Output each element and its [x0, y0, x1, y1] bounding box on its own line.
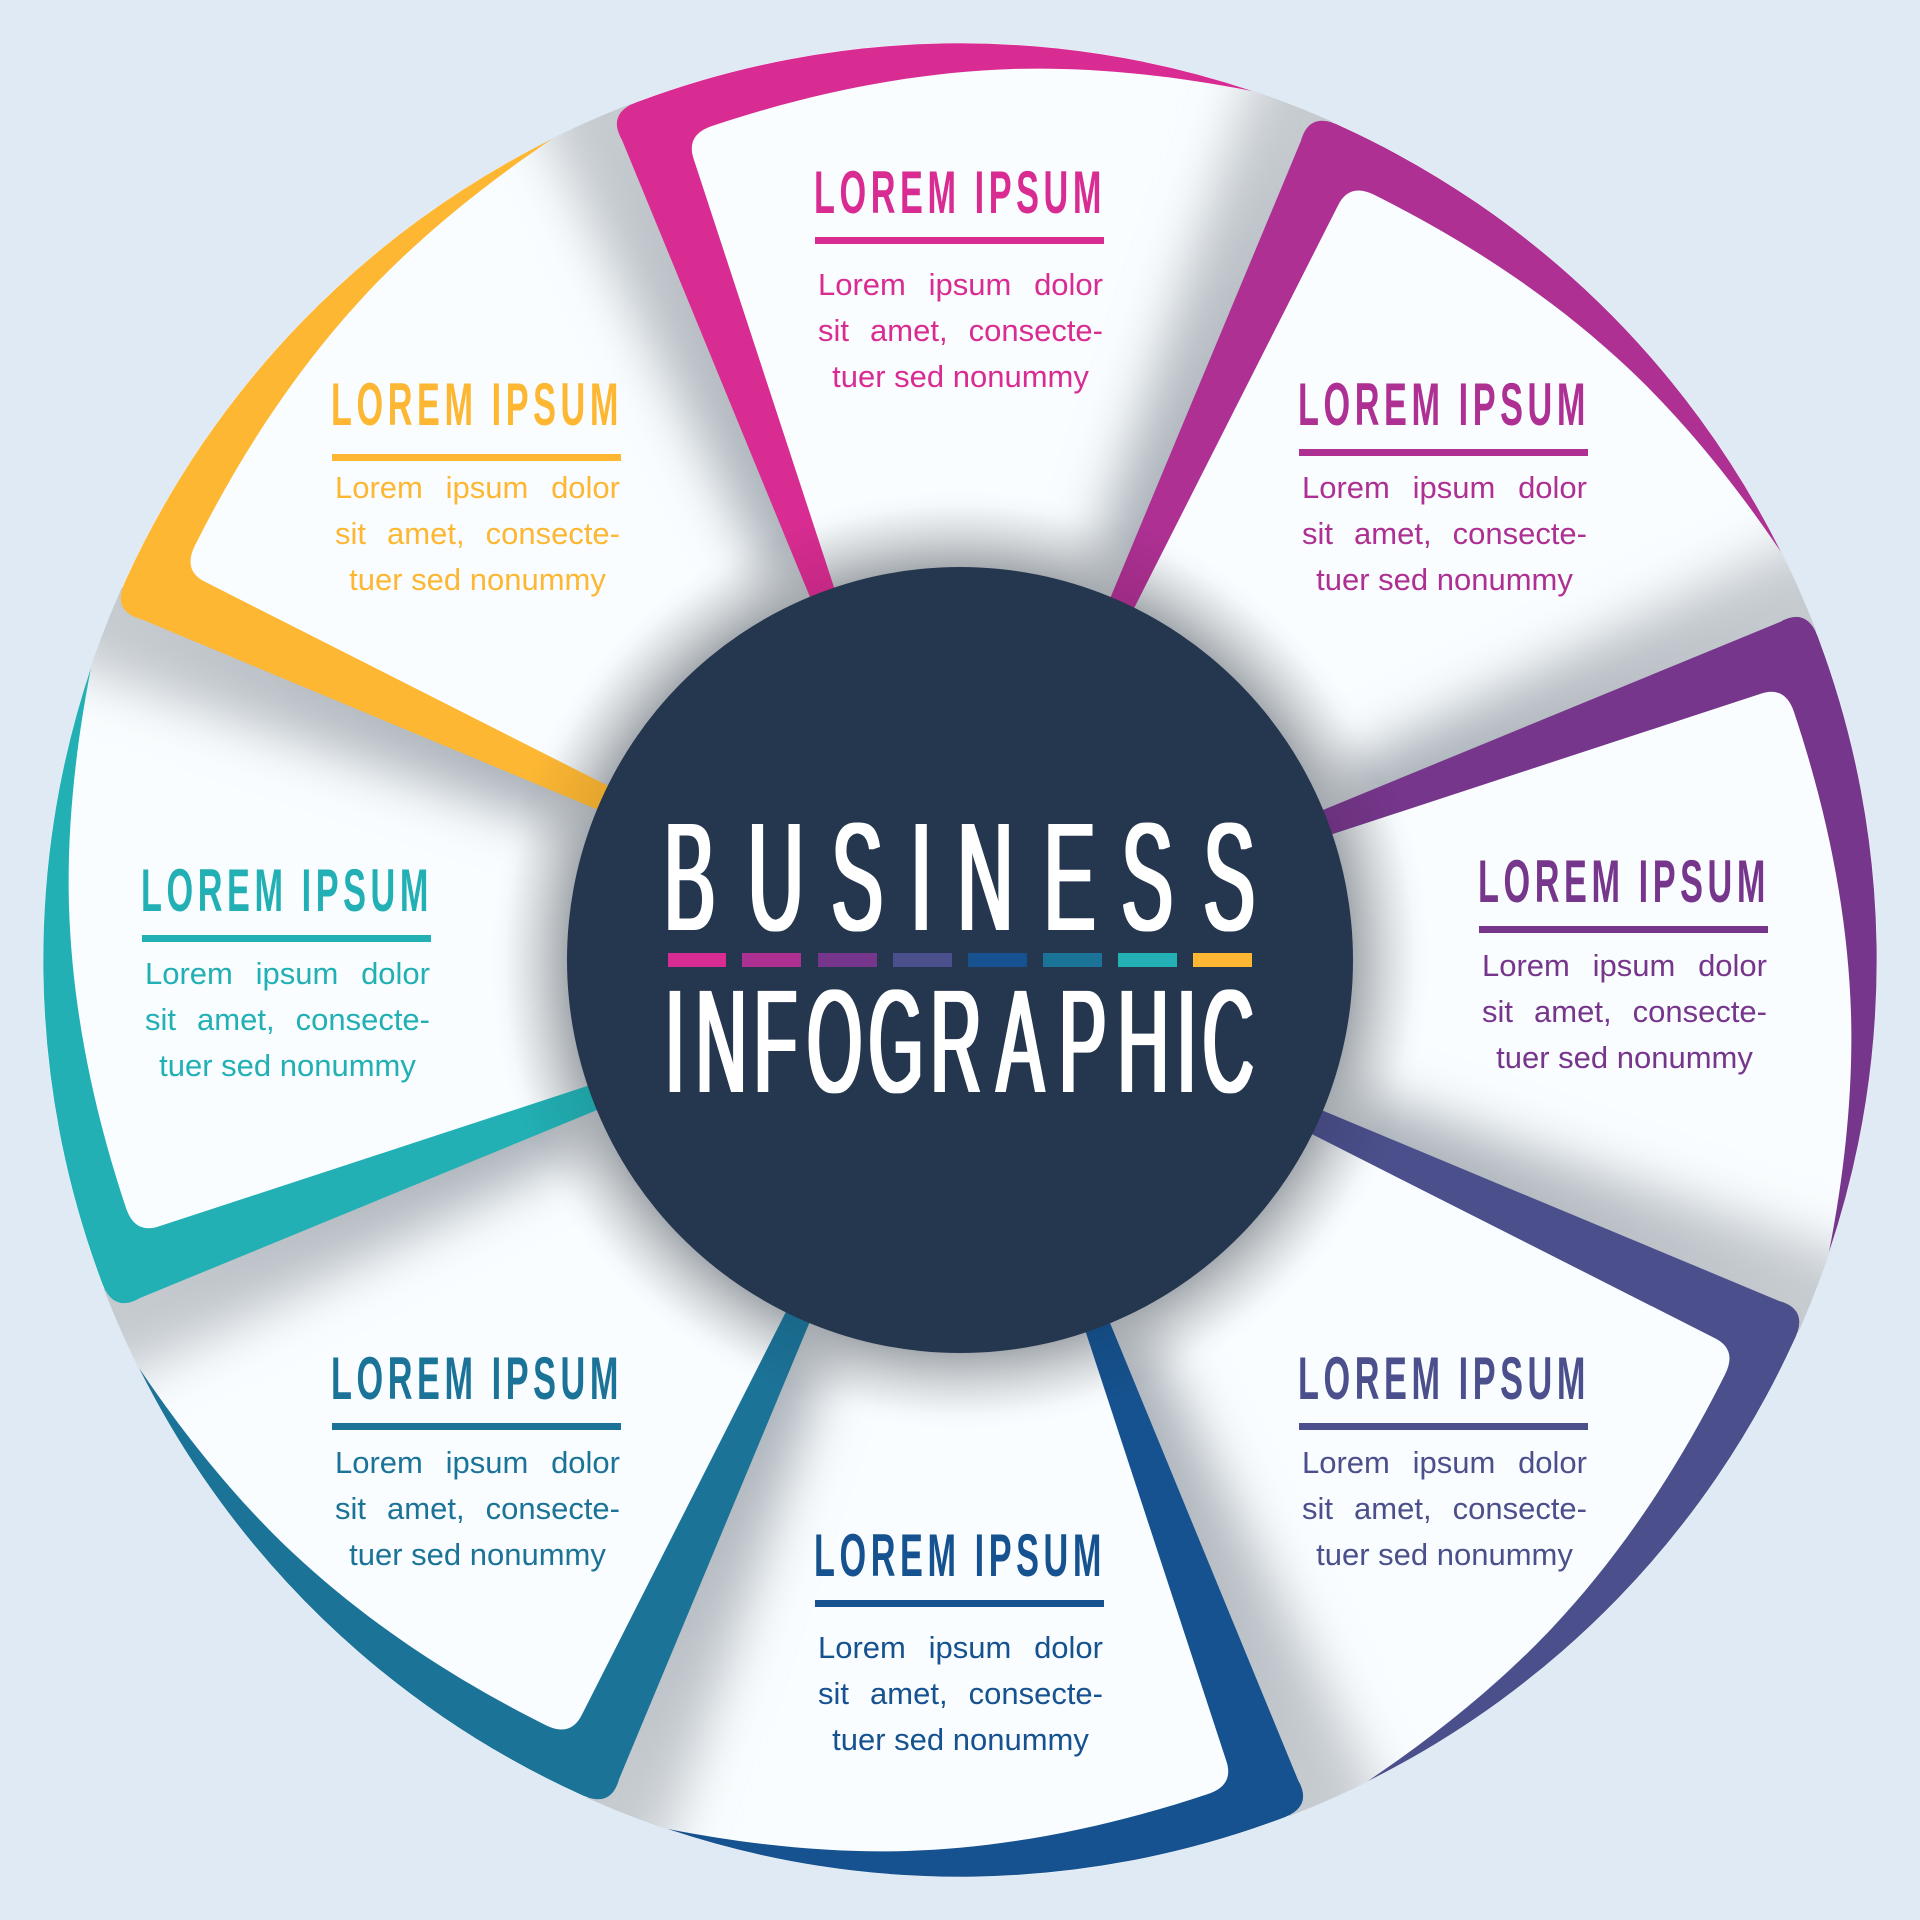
text block: indigo: Lorem ipsum dolor [1302, 1445, 1587, 1480]
text block: purple: tuer sed nonummy [1496, 1040, 1753, 1075]
text block: teal: sit amet, consecte- [335, 1491, 620, 1526]
text block: blue: tuer sed nonummy [832, 1722, 1089, 1757]
text block: yellow: LOREM IPSUM [331, 371, 623, 438]
text block: purple [1478, 848, 1770, 1075]
text block: purple: Lorem ipsum dolor [1482, 948, 1767, 983]
center circle soft shadow [504, 504, 1416, 1416]
panel accent: yellow [69, 105, 937, 974]
text block: magenta [1298, 371, 1590, 597]
text block: magenta: LOREM IPSUM [1298, 371, 1590, 438]
text block: yellow: Lorem ipsum dolor [335, 470, 620, 505]
text block: yellow: sit amet, consecte- [335, 516, 620, 551]
colour dashes [668, 953, 1252, 967]
text block: indigo [1298, 1345, 1590, 1572]
center circle [567, 567, 1353, 1353]
panel accent: indigo [983, 946, 1851, 1815]
text block: cyan: tuer sed nonummy [159, 1048, 416, 1083]
text block: cyan [141, 857, 433, 1083]
text block: pink [814, 159, 1106, 394]
text block: pink: LOREM IPSUM [814, 159, 1106, 226]
text block: teal: LOREM IPSUM [331, 1345, 623, 1412]
text block: indigo: LOREM IPSUM [1298, 1345, 1590, 1412]
shadow tint over accents [490, 490, 1430, 1430]
text block: teal [331, 1345, 623, 1572]
text block: indigo: tuer sed nonummy [1316, 1537, 1573, 1572]
panel accent: teal [105, 983, 974, 1851]
panel accent: cyan [43, 668, 636, 1303]
text block: blue: LOREM IPSUM [814, 1522, 1106, 1589]
text block: blue: sit amet, consecte- [818, 1676, 1103, 1711]
text block: pink: tuer sed nonummy [832, 359, 1089, 394]
title: INFOGRAPHIC: INFOGRAPHIC [665, 961, 1254, 1124]
title: BUSINESS: BUSINESS [664, 791, 1255, 963]
text block: magenta: tuer sed nonummy [1316, 562, 1573, 597]
panel accent: blue [668, 1284, 1303, 1877]
panel accent: pink [617, 43, 1252, 636]
text block: teal: tuer sed nonummy [349, 1537, 606, 1572]
text block: purple: sit amet, consecte- [1482, 994, 1767, 1029]
text block: cyan: sit amet, consecte- [145, 1002, 430, 1037]
text block: pink: sit amet, consecte- [818, 313, 1103, 348]
text block: cyan: LOREM IPSUM [141, 857, 433, 924]
text block: blue [814, 1522, 1106, 1757]
text block: magenta: Lorem ipsum dolor [1302, 470, 1587, 505]
text block: yellow: tuer sed nonummy [349, 562, 606, 597]
panel accent: purple [1284, 617, 1877, 1252]
text block: blue: Lorem ipsum dolor [818, 1630, 1103, 1665]
text block: indigo: sit amet, consecte- [1302, 1491, 1587, 1526]
text block: cyan: Lorem ipsum dolor [145, 956, 430, 991]
text block: magenta: sit amet, consecte- [1302, 516, 1587, 551]
text block: purple: LOREM IPSUM [1478, 848, 1770, 915]
text block: pink: Lorem ipsum dolor [818, 267, 1103, 302]
panel accent: magenta [946, 69, 1815, 937]
text block: yellow [331, 371, 623, 597]
text block: teal: Lorem ipsum dolor [335, 1445, 620, 1480]
